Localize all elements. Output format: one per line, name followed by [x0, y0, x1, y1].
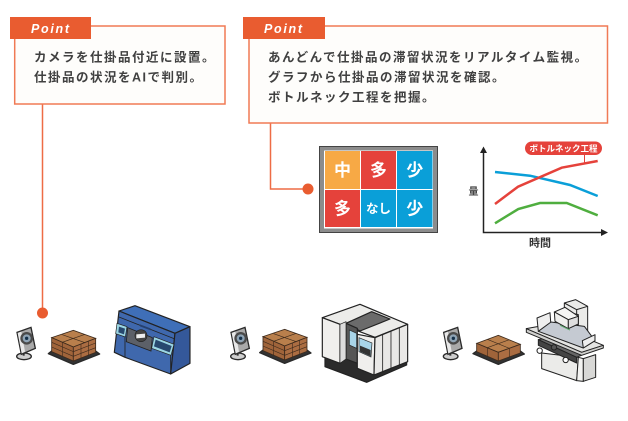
station 2	[231, 304, 408, 382]
icon: blue machine	[114, 306, 190, 374]
connector: left point to camera	[37, 104, 48, 318]
station 3	[443, 300, 603, 381]
icon: camera	[231, 327, 249, 360]
icon: pallet of boxes	[48, 330, 100, 364]
text: camera description: カメラを仕掛品付近に設置。	[34, 50, 216, 64]
station 1	[17, 306, 190, 374]
tag: Point	[10, 17, 91, 39]
tag: Point: Point	[264, 22, 304, 36]
icon: white machine	[322, 304, 408, 382]
series: green	[495, 203, 598, 223]
cell: many: 多	[370, 160, 387, 180]
text: andon description: ボトルネック工程を把握。	[268, 90, 436, 104]
tag: Point: Point	[31, 22, 71, 36]
text: andon description: あんどんで仕掛品の滞留状況をリアルタイム監視。	[268, 50, 589, 64]
cell: medium: 中	[334, 161, 351, 180]
icon: pallet of boxes	[260, 329, 311, 363]
icon: camera	[17, 327, 35, 360]
cell: few: 少	[406, 161, 423, 180]
cell: many: 多	[334, 198, 351, 218]
label: bottleneck process: ボトルネック工程	[529, 144, 598, 154]
text: camera description: 仕掛品の状況をAIで判別。	[34, 70, 204, 84]
icon: camera	[443, 327, 462, 360]
icon: grinding machine	[526, 300, 603, 381]
series: blue	[495, 172, 598, 196]
series: red bottleneck	[495, 161, 598, 204]
icon: pallet of boxes	[473, 335, 524, 364]
axis label: quantity: 量	[468, 186, 478, 198]
line chart	[468, 142, 608, 250]
tag: Point	[243, 17, 325, 39]
axis label: time: 時間	[529, 236, 551, 250]
cell: few: 少	[406, 200, 423, 218]
panel: camera point	[10, 17, 225, 104]
text: andon description: グラフから仕掛品の滞留状況を確認。	[268, 70, 506, 84]
panel: andon point	[243, 17, 608, 123]
cell: none: なし	[366, 202, 391, 216]
andon monitor	[320, 146, 438, 232]
connector: right point to monitor	[270, 123, 314, 194]
